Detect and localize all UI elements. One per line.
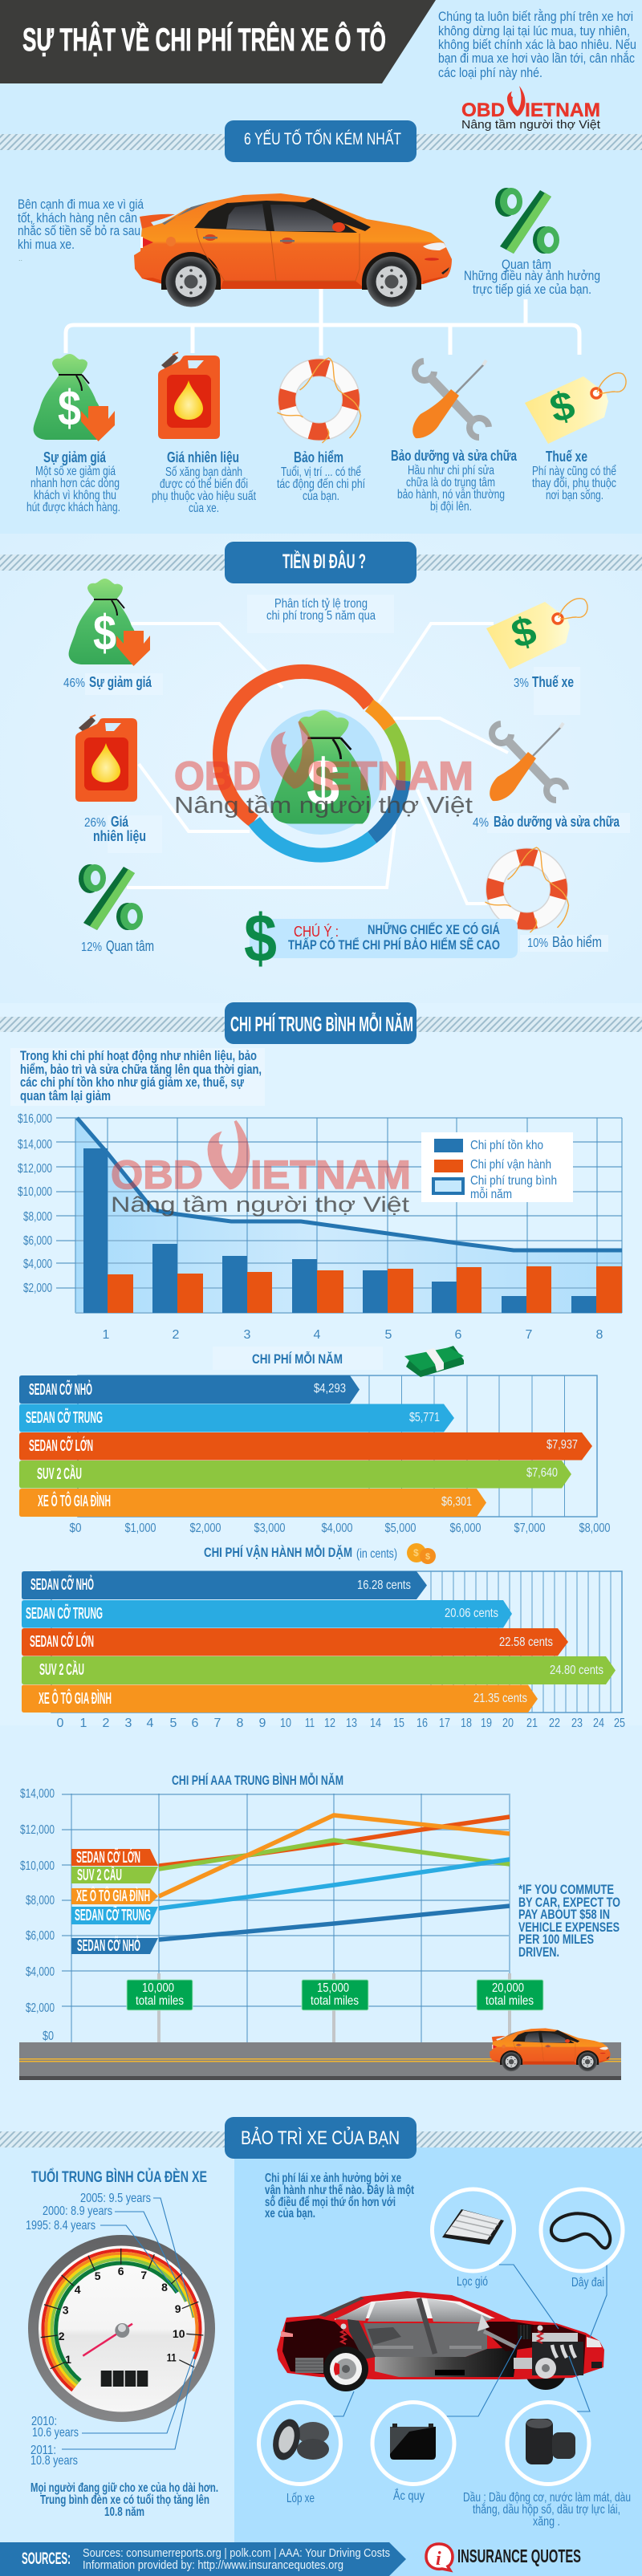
bar chart: cost per year: $1,000 bbox=[125, 1522, 156, 1535]
bar chart: running cost per mile: SEDAN CỠ TRUNG bbox=[26, 1603, 103, 1623]
logo: insurance quotes bbox=[426, 2544, 581, 2570]
panel: insurance: của bạn. bbox=[303, 490, 339, 503]
gauge: 11 bbox=[167, 2351, 177, 2364]
gauge: 10 bbox=[173, 2327, 185, 2340]
panel: maintenance and repair: Hầu như chi phí sửa bbox=[408, 464, 494, 477]
part: oil bbox=[463, 2403, 631, 2529]
panel: insurance: Bảo hiểm bbox=[294, 449, 343, 465]
bar chart: cost per year: SEDAN CỠ NHỎ bbox=[29, 1379, 92, 1399]
bar chart: running cost per mile: 7 bbox=[214, 1717, 221, 1730]
bar chart: running cost per mile: 22.58 cents bbox=[499, 1635, 553, 1649]
y axis labels: $12,000 bbox=[18, 1162, 52, 1176]
section heading: 6 factors: 6 YẾU TỐ TỐN KÉM NHẤT bbox=[244, 129, 401, 148]
bar chart: cost per year: XE Ô TÔ GIA ĐÌNH bbox=[38, 1491, 111, 1510]
footer: sources: SOURCES: bbox=[22, 2550, 71, 2568]
note box: cheap cars: $ bbox=[244, 900, 277, 976]
watermark: Nâng tầm người thợ Việt bbox=[174, 793, 473, 819]
bar chart: running cost per mile: 20 bbox=[502, 1717, 514, 1730]
x axis labels bbox=[103, 1328, 603, 1342]
gauge: 6 bbox=[118, 2265, 124, 2277]
average line bbox=[77, 1118, 622, 1250]
bar chart: cost per year bbox=[19, 1375, 611, 1535]
callout: concern: trực tiếp giá xe của bạn. bbox=[473, 282, 591, 297]
section heading: 6 factors bbox=[0, 120, 642, 162]
panel: depreciation: Sự giảm giá bbox=[43, 449, 107, 465]
gauge leaders and years: 10.8 years bbox=[30, 2454, 78, 2468]
item: 26% fuel: nhiên liệu bbox=[93, 828, 146, 844]
panel: depreciation: khách vì không thu bbox=[34, 489, 116, 502]
panel: fuel: của xe. bbox=[189, 502, 219, 515]
gauge: 5 bbox=[95, 2269, 101, 2282]
combo chart: ownership vs operating cost bbox=[18, 1112, 622, 1342]
section heading: average yearly cost bbox=[0, 1002, 642, 1044]
panel: fuel: phụ thuộc vào hiệu suất bbox=[152, 490, 256, 503]
intro text bbox=[438, 9, 636, 80]
bar chart: cost per year: $3,000 bbox=[254, 1522, 286, 1535]
bar chart: running cost per mile: 15 bbox=[393, 1717, 404, 1730]
footer: sources: Sources: consumerreports.org | polk.com | AAA: Your Driving Costs bbox=[83, 2546, 390, 2560]
part: belt bbox=[541, 2189, 623, 2290]
item: 26% fuel: Giá bbox=[111, 814, 129, 830]
paragraph panel bbox=[10, 1048, 265, 1106]
gauge: 1 bbox=[65, 2353, 71, 2366]
bar chart: running cost per mile: 4 bbox=[147, 1717, 154, 1730]
bars: operating cost bbox=[108, 1266, 622, 1313]
bar chart: running cost per mile: 0 bbox=[57, 1717, 64, 1730]
panel: tax bbox=[525, 373, 626, 502]
bar chart: running cost per mile: 13 bbox=[346, 1717, 357, 1730]
note box: cheap cars: THẤP CÓ THỂ CHI PHÍ BẢO HIỂM SẼ CAO bbox=[288, 937, 500, 953]
gauge: 3 bbox=[63, 2303, 69, 2316]
gauge: 2 bbox=[59, 2330, 65, 2342]
item: 12% concern: 12% bbox=[81, 941, 102, 954]
line chart: AAA cost by mileage: $10,000 bbox=[20, 1859, 55, 1873]
x axis labels: 1 bbox=[103, 1328, 110, 1342]
analysis note: Phân tích tỷ lệ trong bbox=[274, 597, 368, 611]
bar chart: running cost per mile: SEDAN CỠ NHỎ bbox=[30, 1574, 94, 1594]
bar chart: running cost per mile: 16 bbox=[416, 1717, 428, 1730]
watermark bbox=[174, 721, 473, 819]
connector lines bbox=[127, 624, 508, 904]
gauge leaders and years: 2005: 9.5 years bbox=[80, 2192, 151, 2205]
section heading: where money goes: TIỀN ĐI ĐÂU ? bbox=[282, 549, 366, 573]
paragraph panel: Trong khi chi phí hoạt động như nhiên liệu, bảo bbox=[20, 1048, 257, 1063]
commute callout: PER 100 MILES bbox=[518, 1932, 594, 1947]
item: 26% fuel: 26% bbox=[84, 816, 106, 830]
title: SỰ THẬT VỀ CHI PHÍ TRÊN XE Ô TÔ bbox=[22, 21, 386, 58]
footer: sources: Information provided by: http://www.insurancequotes.org bbox=[83, 2558, 343, 2572]
bar chart: running cost per mile: 10 bbox=[280, 1717, 291, 1730]
mile signs bbox=[127, 1973, 543, 2042]
panel: depreciation: hút được khách hàng. bbox=[26, 501, 120, 514]
bar chart: running cost per mile: 24.80 cents bbox=[550, 1664, 603, 1677]
maintenance panels bbox=[0, 2135, 642, 2576]
y axis labels bbox=[18, 1112, 52, 1295]
chart heading: cost per year: CHI PHÍ MỖI NĂM bbox=[252, 1351, 343, 1367]
analysis note bbox=[247, 595, 394, 633]
gauge: 4 bbox=[75, 2283, 81, 2296]
line chart: AAA cost by mileage: $6,000 bbox=[26, 1929, 55, 1943]
commute callout: DRIVEN. bbox=[518, 1944, 559, 1960]
commute callout: PAY ABOUT $58 IN bbox=[518, 1907, 610, 1922]
mile signs: total miles bbox=[136, 1994, 184, 2008]
panel: fuel bbox=[152, 352, 256, 515]
item: 4% maintenance bbox=[473, 723, 630, 833]
icon: coins: $ bbox=[425, 1552, 430, 1562]
section heading: maintain your car: BẢO TRÌ XE CỦA BẠN bbox=[241, 2126, 400, 2149]
item: 4% maintenance: 4% bbox=[473, 816, 489, 830]
x axis labels: 4 bbox=[314, 1328, 321, 1342]
icon: cash stack bbox=[404, 1346, 464, 1377]
chart heading: running cost per mile: (in cents) bbox=[356, 1547, 397, 1561]
left text: nhắc số tiền sẽ bỏ ra sau bbox=[18, 223, 140, 238]
watermark: IETNAM bbox=[250, 1152, 411, 1197]
gauge: 8 bbox=[161, 2281, 168, 2294]
gauge leaders and years bbox=[26, 2192, 195, 2468]
bar chart: cost per year: SEDAN CỠ LỚN bbox=[29, 1436, 93, 1455]
bar chart: cost per year: $0 bbox=[69, 1522, 82, 1535]
item: 12% concern: Quan tâm bbox=[106, 938, 154, 954]
watermark: OBD bbox=[111, 1152, 203, 1197]
panel: tax: thay đổi, phụ thuộc bbox=[532, 476, 616, 490]
part: oil: xăng . bbox=[533, 2515, 560, 2529]
watermark: OBD bbox=[174, 754, 261, 798]
icon: centre money bag bbox=[272, 710, 371, 824]
y axis labels: $8,000 bbox=[23, 1210, 52, 1224]
item: 26% fuel bbox=[75, 715, 162, 853]
bar chart: running cost per mile: 12 bbox=[324, 1717, 335, 1730]
line chart: AAA cost by mileage: $8,000 bbox=[26, 1894, 55, 1908]
bar chart: running cost per mile: 23 bbox=[571, 1717, 583, 1730]
paragraph panel: các chi phí tồn kho như giá giảm xe, thuế, sự bbox=[20, 1075, 245, 1090]
note box: cheap cars: CHÚ Ý : bbox=[294, 923, 339, 940]
x axis labels: 6 bbox=[455, 1328, 462, 1342]
bar chart: cost per year: $4,000 bbox=[321, 1522, 353, 1535]
panel: depreciation: Một số xe giảm giá bbox=[35, 465, 116, 478]
callout: concern: Quan tâm bbox=[502, 257, 551, 272]
section heading: where money goes bbox=[0, 542, 642, 583]
bar chart: running cost per mile: 6 bbox=[192, 1717, 199, 1730]
panel: depreciation: nhanh hơn các dòng bbox=[30, 477, 120, 490]
bar chart: running cost per mile: 9 bbox=[259, 1717, 266, 1730]
bar chart: cost per year: $7,937 bbox=[547, 1438, 578, 1452]
panel: tax: Thuế xe bbox=[546, 449, 587, 465]
donut ring chart bbox=[220, 672, 404, 855]
y axis labels: $10,000 bbox=[18, 1185, 52, 1199]
bar chart: running cost per mile: 16.28 cents bbox=[357, 1579, 411, 1592]
item: 46% depreciation: Sự giảm giá bbox=[89, 674, 152, 690]
series flags: SEDAN CỠ LỚN bbox=[76, 1847, 140, 1867]
line chart: AAA cost by mileage: $12,000 bbox=[20, 1823, 55, 1837]
bar chart: running cost per mile: 24 bbox=[593, 1717, 604, 1730]
legend: mỗi năm bbox=[470, 1186, 512, 1201]
line chart: AAA cost by mileage bbox=[20, 1787, 510, 2043]
x axis labels: 2 bbox=[173, 1328, 180, 1342]
part: battery: Ắc quy bbox=[393, 2488, 425, 2503]
chart heading: running cost per mile: CHI PHÍ VẬN HÀNH MỖI DẶM bbox=[204, 1545, 352, 1560]
section heading: average yearly cost: CHI PHÍ TRUNG BÌNH MỖI NĂM bbox=[230, 1012, 413, 1036]
bar chart: running cost per mile: 3 bbox=[125, 1717, 132, 1730]
icon: orange car bbox=[134, 193, 452, 307]
gauge leaders and years: 10.6 years bbox=[32, 2426, 79, 2440]
bar chart: cost per year: $6,301 bbox=[441, 1495, 472, 1509]
legend: Chi phí vận hành bbox=[470, 1158, 551, 1172]
bar chart: running cost per mile: SUV 2 CẦU bbox=[39, 1660, 84, 1679]
part: belt: Dây đai bbox=[571, 2276, 604, 2290]
panel: insurance: Tuổi, vị trí ... có thể bbox=[281, 465, 361, 479]
item: 10% insurance: 10% bbox=[527, 937, 548, 950]
item: 46% depreciation: 46% bbox=[63, 677, 85, 690]
bar chart: cost per year: $6,000 bbox=[449, 1522, 482, 1535]
panel: insurance: tác động đến chi phí bbox=[277, 477, 365, 491]
bar chart: cost per year: SUV 2 CẦU bbox=[37, 1465, 82, 1483]
bar chart: running cost per mile: SEDAN CỠ LỚN bbox=[30, 1631, 94, 1651]
left text bbox=[18, 197, 144, 262]
panel: fuel: Số xăng bạn dành bbox=[165, 465, 242, 479]
caption: headlight age: 10.8 năm bbox=[104, 2505, 144, 2519]
gauge: 7 bbox=[140, 2269, 147, 2281]
icon: percent bbox=[495, 188, 559, 254]
maintenance intro text bbox=[265, 2172, 414, 2220]
panel: tax: nơi bạn sống. bbox=[546, 489, 603, 502]
watermark bbox=[111, 1121, 411, 1217]
logo: OBD Vietnam: IETNAM bbox=[525, 100, 600, 121]
cutaway car bbox=[277, 2291, 604, 2391]
item: 3% tax: 3% bbox=[514, 677, 529, 690]
part: tires bbox=[258, 2403, 340, 2505]
part: battery bbox=[372, 2403, 454, 2503]
mile signs: 15,000 bbox=[317, 1981, 349, 1995]
mile signs: total miles bbox=[486, 1994, 534, 2008]
part: tires: Lốp xe bbox=[286, 2492, 315, 2505]
x axis labels: 3 bbox=[244, 1328, 251, 1342]
bar chart: cost per year: $5,771 bbox=[409, 1411, 440, 1424]
panel: maintenance and repair: chữa là do trung tâm bbox=[406, 476, 495, 490]
gauge leaders and years: 1995: 8.4 years bbox=[26, 2219, 95, 2233]
paragraph panel: hiểm, bảo trì và sửa chữa tăng lên qua thời gian, bbox=[20, 1062, 262, 1077]
line chart: AAA cost by mileage: $0 bbox=[43, 2030, 54, 2043]
gauge leaders and years: 2000: 8.9 years bbox=[43, 2204, 112, 2218]
maintenance intro text: xe của bạn. bbox=[265, 2207, 315, 2220]
header banner bbox=[0, 0, 436, 83]
callout: concern bbox=[464, 257, 600, 297]
panel: insurance bbox=[277, 358, 365, 503]
item: 3% tax bbox=[486, 599, 587, 715]
panel: fuel: Giá nhiên liệu bbox=[167, 449, 239, 465]
commute callout bbox=[518, 1882, 620, 1960]
callout: concern: Những điều này ảnh hưởng bbox=[464, 268, 600, 283]
item: 46% depreciation bbox=[63, 579, 163, 695]
panel: depreciation bbox=[26, 354, 120, 514]
chart heading: AAA average cost: CHI PHÍ AAA TRUNG BÌNH MỖI NĂM bbox=[172, 1773, 343, 1788]
icon: small car on road bbox=[490, 2028, 611, 2071]
maintenance intro text: số điều để mọi thứ ổn hơn với bbox=[265, 2195, 396, 2209]
item: 3% tax: Thuế xe bbox=[532, 674, 574, 690]
caption: headlight age bbox=[30, 2481, 218, 2519]
bar chart: cost per year: $7,640 bbox=[526, 1466, 558, 1480]
commute callout: *IF YOU COMMUTE bbox=[518, 1882, 614, 1897]
bar chart: running cost per mile: 21.35 cents bbox=[473, 1692, 527, 1705]
gauge: 9 bbox=[175, 2302, 181, 2315]
bar chart: cost per year: $4,293 bbox=[314, 1382, 346, 1396]
bar chart: cost per year: SEDAN CỠ TRUNG bbox=[26, 1408, 103, 1427]
bar chart: running cost per mile: 21 bbox=[526, 1717, 538, 1730]
left text: Bên cạnh đi mua xe vì giá bbox=[18, 197, 144, 212]
line chart: AAA cost by mileage: $4,000 bbox=[26, 1965, 55, 1979]
y axis labels: $6,000 bbox=[23, 1234, 52, 1248]
bar chart: running cost per mile: 8 bbox=[237, 1717, 244, 1730]
mile signs: 20,000 bbox=[492, 1981, 524, 1995]
road bbox=[19, 2042, 621, 2080]
bar chart: cost per year: $5,000 bbox=[385, 1522, 416, 1535]
bar chart: running cost per mile: 20.06 cents bbox=[445, 1607, 498, 1620]
caption: headlight age: Mọi người đang giữ cho xe của họ dài hơn. bbox=[30, 2481, 218, 2495]
y axis labels: $16,000 bbox=[18, 1112, 52, 1126]
series flags bbox=[71, 1847, 158, 1955]
bar chart: running cost per mile: 17 bbox=[439, 1717, 450, 1730]
series flags: XE Ô TÔ GIA ĐÌNH bbox=[76, 1886, 150, 1905]
bar chart: running cost per mile: 14 bbox=[370, 1717, 381, 1730]
logo: OBD Vietnam: Nâng tầm người thợ Việt bbox=[461, 118, 601, 132]
x axis labels: 7 bbox=[526, 1328, 533, 1342]
gauge bbox=[28, 2235, 215, 2422]
panel: maintenance and repair bbox=[391, 360, 518, 514]
paragraph panel: quan tâm lại giảm bbox=[20, 1088, 111, 1103]
bar chart: cost per year: $2,000 bbox=[189, 1522, 221, 1535]
maintenance intro text: Chi phí lái xe ảnh hưởng bởi xe bbox=[265, 2172, 401, 2185]
y axis labels: $14,000 bbox=[18, 1138, 52, 1152]
item: 12% concern bbox=[79, 864, 154, 954]
note box: cheap cars: NHỮNG CHIẾC XE CÓ GIÁ bbox=[368, 921, 500, 937]
icon: coins bbox=[407, 1543, 436, 1564]
connector lines bbox=[66, 289, 579, 356]
x axis labels: 8 bbox=[596, 1328, 603, 1342]
left text: .. bbox=[18, 254, 22, 262]
chart heading: cost per year bbox=[213, 1347, 383, 1370]
bar chart: running cost per mile: XE Ô TÔ GIA ĐÌNH bbox=[39, 1688, 112, 1708]
bar chart: running cost per mile: 1 bbox=[80, 1717, 87, 1730]
bar chart: running cost per mile: 2 bbox=[103, 1717, 110, 1730]
heading: headlight age: TUỔI TRUNG BÌNH CỦA ĐÈN XE bbox=[31, 2168, 207, 2186]
legend: Chi phí tồn kho bbox=[470, 1139, 543, 1152]
y axis labels: $2,000 bbox=[23, 1282, 52, 1295]
watermark: Nâng tầm người thợ Việt bbox=[111, 1193, 410, 1217]
line chart: AAA cost by mileage: $2,000 bbox=[26, 2001, 55, 2015]
bar chart: cost per year: $7,000 bbox=[514, 1522, 546, 1535]
y axis labels: $4,000 bbox=[23, 1258, 52, 1271]
section heading: maintain your car bbox=[0, 2117, 642, 2159]
bar chart: running cost per mile bbox=[22, 1571, 625, 1730]
panel: maintenance and repair: Bảo dưỡng và sửa chữa bbox=[391, 448, 518, 464]
part connectors bbox=[332, 2265, 607, 2416]
logo: insurance quotes: i bbox=[436, 2549, 441, 2570]
panel: fuel: được có thể biến đổi bbox=[160, 477, 248, 491]
bars: ownership cost bbox=[83, 1148, 596, 1313]
bar chart: running cost per mile: 18 bbox=[461, 1717, 472, 1730]
watermark: IETNAM bbox=[311, 754, 473, 798]
maintenance intro text: vận hành như thế nào. Đây là một bbox=[265, 2184, 414, 2197]
gauge leaders and years: 2011: bbox=[30, 2444, 56, 2457]
panel: maintenance and repair: bảo hành, nó vẫn thường bbox=[397, 486, 505, 502]
bar chart: running cost per mile: 5 bbox=[170, 1717, 177, 1730]
left text: tốt, khách hàng nên cân bbox=[18, 210, 137, 226]
item: 10% insurance bbox=[485, 847, 608, 952]
gauge leaders and years: 2010: bbox=[31, 2415, 57, 2428]
icon: coins: $ bbox=[413, 1547, 419, 1558]
x axis labels: 5 bbox=[385, 1328, 392, 1342]
series flags: SUV 2 CẦU bbox=[77, 1866, 122, 1884]
panel: maintenance and repair: bị đội lên. bbox=[430, 500, 472, 514]
bar chart: running cost per mile: 22 bbox=[549, 1717, 560, 1730]
series flags: SEDAN CỠ TRUNG bbox=[75, 1905, 151, 1924]
line chart: AAA cost by mileage: $14,000 bbox=[20, 1787, 55, 1801]
intro text: các loại phí này nhé. bbox=[438, 65, 542, 80]
note box: cheap cars bbox=[244, 900, 518, 976]
bar chart: running cost per mile: 11 bbox=[305, 1717, 315, 1730]
bar chart: running cost per mile: 25 bbox=[614, 1717, 625, 1730]
analysis note: chi phí trong 5 năm qua bbox=[266, 609, 376, 623]
caption: headlight age: Trung bình đèn xe có tuổi thọ tăng lên bbox=[40, 2493, 209, 2507]
series flags: SEDAN CỠ NHỎ bbox=[77, 1936, 140, 1955]
bar chart: cost per year: $8,000 bbox=[579, 1522, 611, 1535]
footer: sources bbox=[0, 2542, 406, 2576]
legend bbox=[421, 1132, 573, 1202]
part: air filter: Lọc gió bbox=[457, 2275, 488, 2289]
logo: OBD Vietnam bbox=[461, 86, 601, 132]
logo: OBD Vietnam: OBD bbox=[461, 100, 505, 121]
mile signs: total miles bbox=[311, 1994, 359, 2008]
part: air filter bbox=[432, 2189, 514, 2289]
item: 10% insurance: Bảo hiểm bbox=[552, 934, 602, 950]
left text: khi mua xe. bbox=[18, 237, 75, 252]
legend: Chi phí trung bình bbox=[470, 1174, 557, 1188]
bar chart: running cost per mile: 19 bbox=[481, 1717, 492, 1730]
mile signs: 10,000 bbox=[142, 1981, 174, 1995]
